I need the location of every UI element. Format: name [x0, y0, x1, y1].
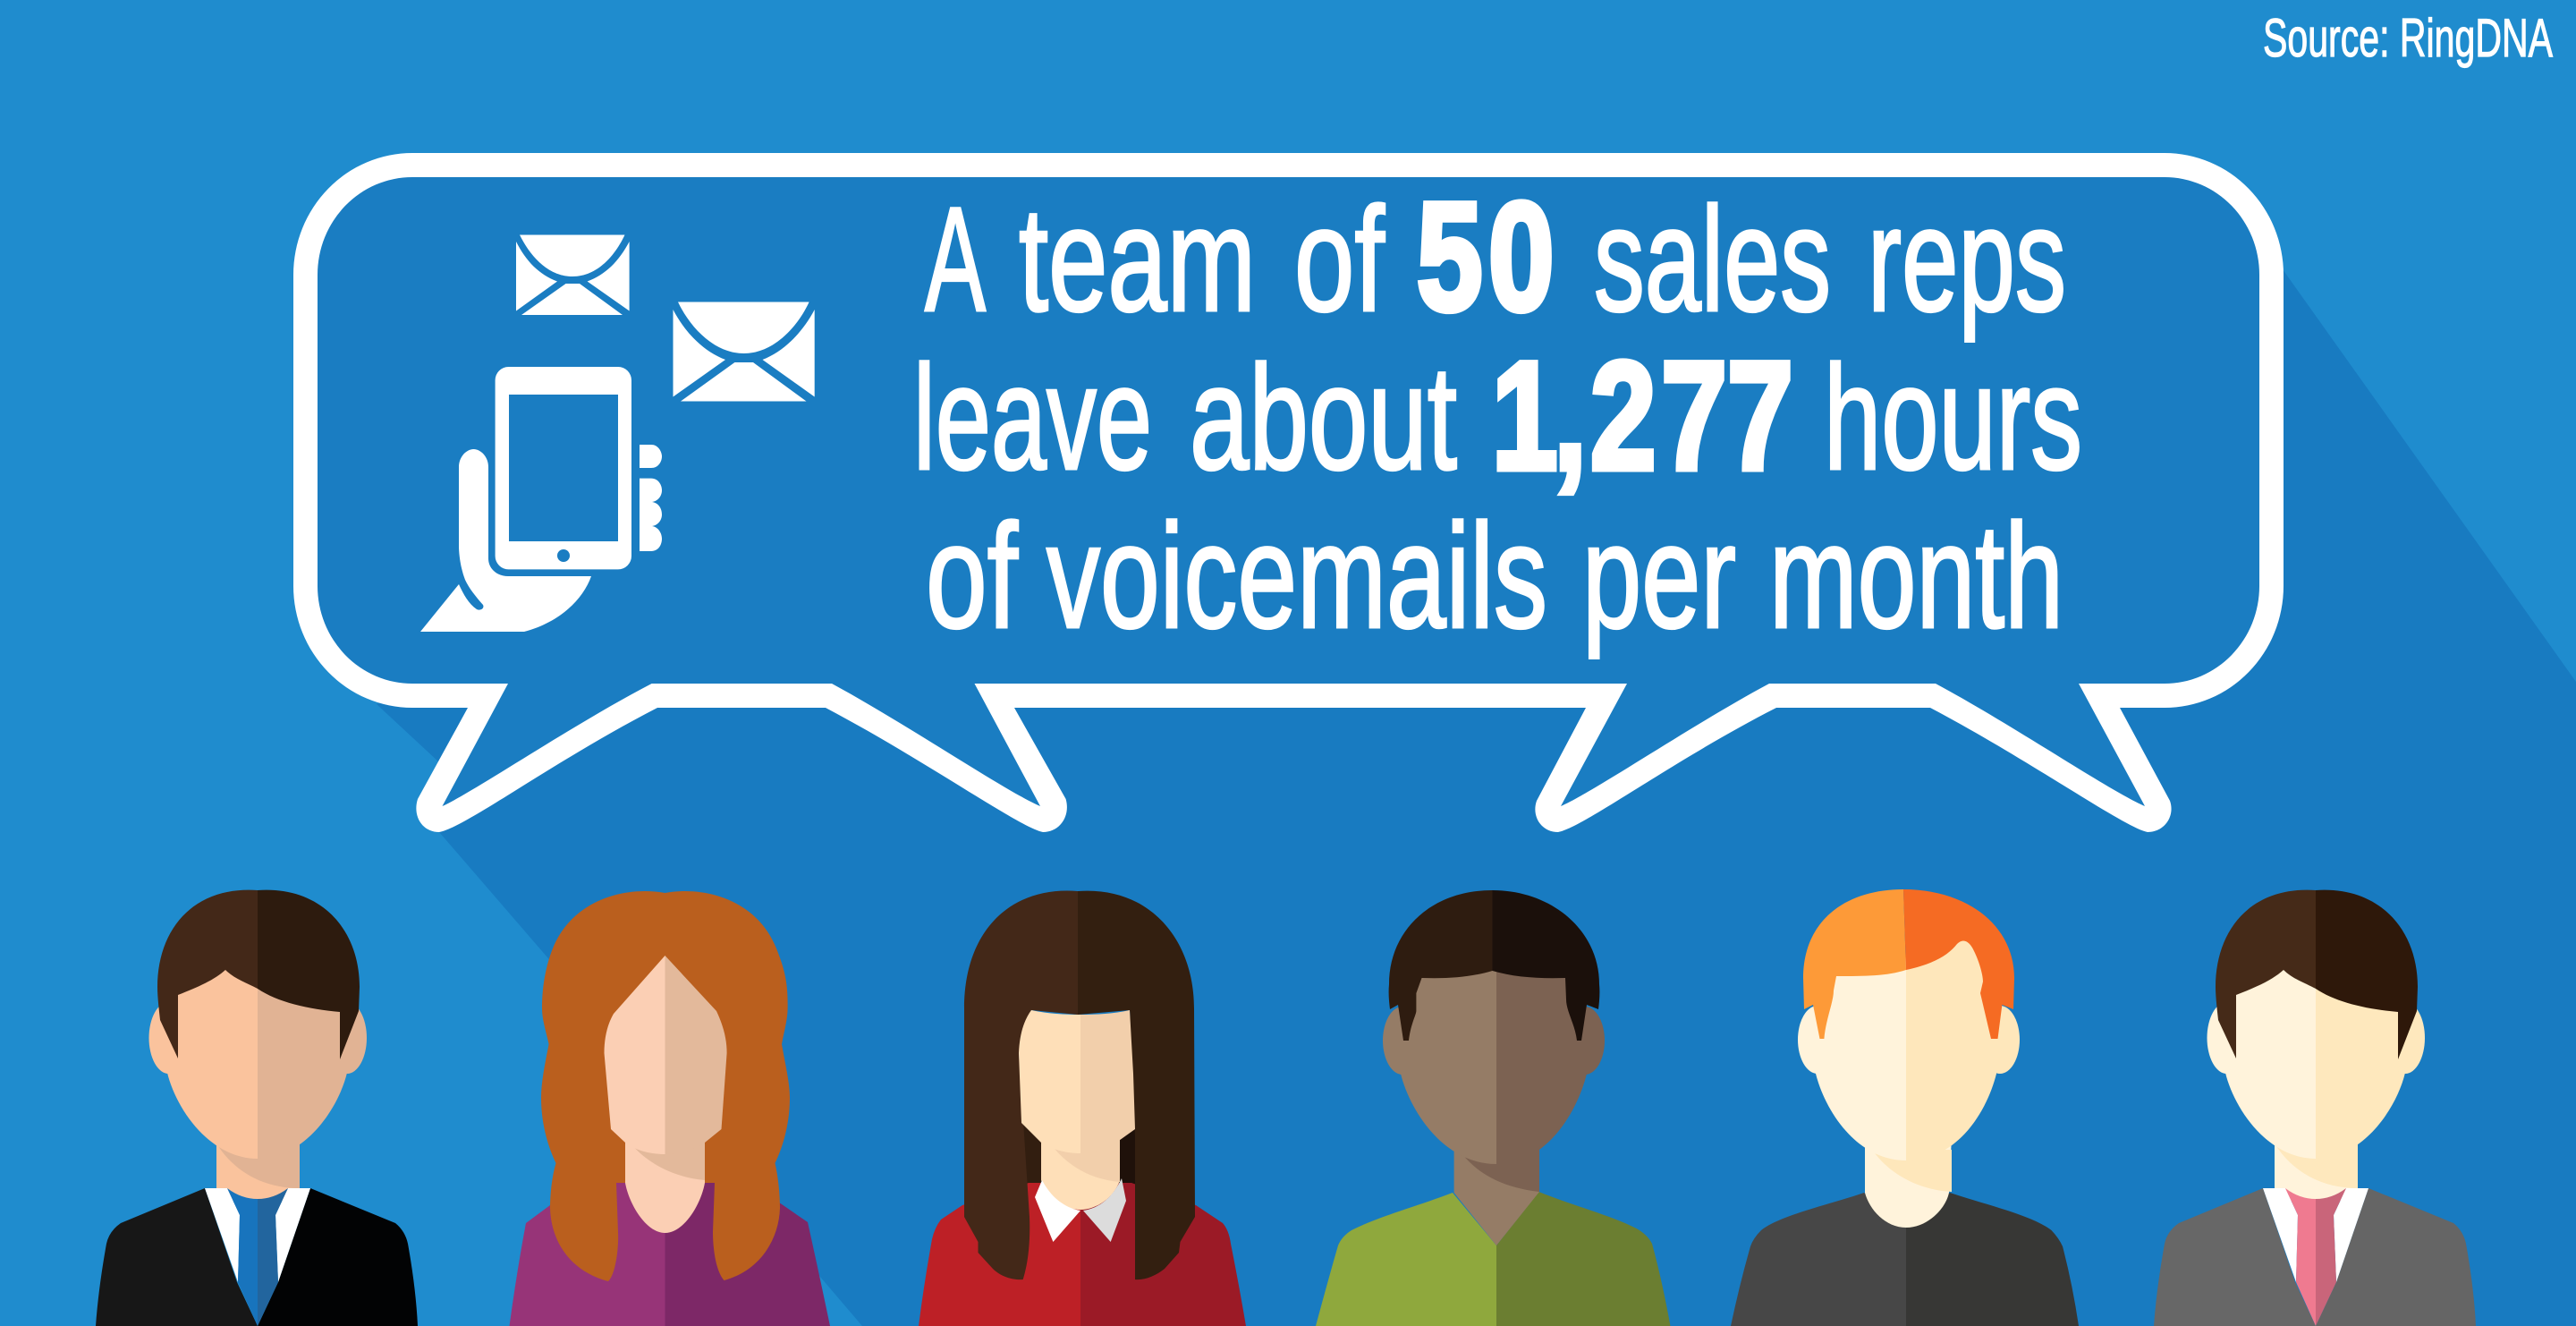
headline line 3 [926, 494, 2063, 659]
headline line 1 [925, 170, 2066, 343]
person 1: man in black suit with blue tie [96, 890, 418, 1326]
hair [2216, 890, 2418, 1059]
icon: two envelopes and hand holding phone [420, 234, 815, 632]
neck [1041, 1127, 1120, 1210]
dark hair behind neck [1023, 1118, 1136, 1186]
pink tie [2285, 1188, 2346, 1326]
ears [148, 1002, 367, 1074]
red top [919, 1183, 1246, 1326]
headline [913, 170, 2082, 659]
person 6: man in grey suit with pink tie [2154, 890, 2476, 1326]
neck [625, 1127, 705, 1233]
auburn hair [541, 891, 790, 1281]
white shirt [205, 1188, 310, 1282]
person 4: man with dark skin and green top [1316, 890, 1671, 1326]
headline line 2: hours [1824, 336, 2082, 501]
dark top [1731, 1193, 2079, 1326]
headline line 3: month [1769, 494, 2063, 659]
headline line 1: team [1019, 177, 1256, 343]
face [605, 956, 727, 1154]
icon: small envelope [516, 234, 630, 315]
headline line 2: about [1190, 336, 1457, 501]
neck [2275, 1127, 2358, 1201]
icon: phone [496, 367, 631, 569]
icon: fingers [640, 445, 662, 551]
speech bubble [293, 153, 2284, 832]
face [1401, 957, 1587, 1164]
headline line 1: reps [1868, 177, 2066, 343]
purple top [510, 1181, 830, 1326]
headline line 1: of [1294, 177, 1385, 343]
white shirt [2263, 1188, 2368, 1282]
face [1816, 931, 1996, 1160]
icon: hand [420, 449, 591, 632]
collar [1035, 1178, 1126, 1242]
neck [1865, 1136, 1952, 1228]
face [2225, 957, 2405, 1159]
headline line 1: 50 [1417, 170, 1555, 343]
icon: large envelope [673, 302, 815, 401]
grey suit [2154, 1188, 2476, 1326]
headline line 2: leave [913, 336, 1152, 501]
ears [1798, 1006, 2020, 1074]
headline line 2: 1,277 [1492, 329, 1793, 502]
face [167, 957, 347, 1159]
headline line 1: sales [1594, 177, 1831, 343]
neck [216, 1127, 300, 1201]
black suit [96, 1188, 418, 1326]
headline line 2 [913, 329, 2082, 502]
ears [2207, 1002, 2425, 1074]
person 3: woman with long dark hair and red top [919, 891, 1246, 1326]
hair [1389, 890, 1599, 1041]
headline line 3: of [926, 494, 1019, 659]
orange hair [1803, 889, 2014, 1039]
green top [1316, 1192, 1671, 1326]
headline line 3: voicemails [1046, 494, 1547, 659]
headline line 1: A [925, 177, 986, 343]
ears [1383, 1007, 1605, 1075]
hair [964, 891, 1195, 1279]
person 5: man with orange hair and dark top [1731, 889, 2079, 1326]
hair [157, 890, 360, 1059]
headline line 3: per [1582, 494, 1736, 659]
face [1019, 1010, 1135, 1153]
person 2: woman with long auburn hair and purple top [510, 891, 830, 1326]
neck [1454, 1136, 1539, 1245]
blue tie [227, 1188, 288, 1326]
